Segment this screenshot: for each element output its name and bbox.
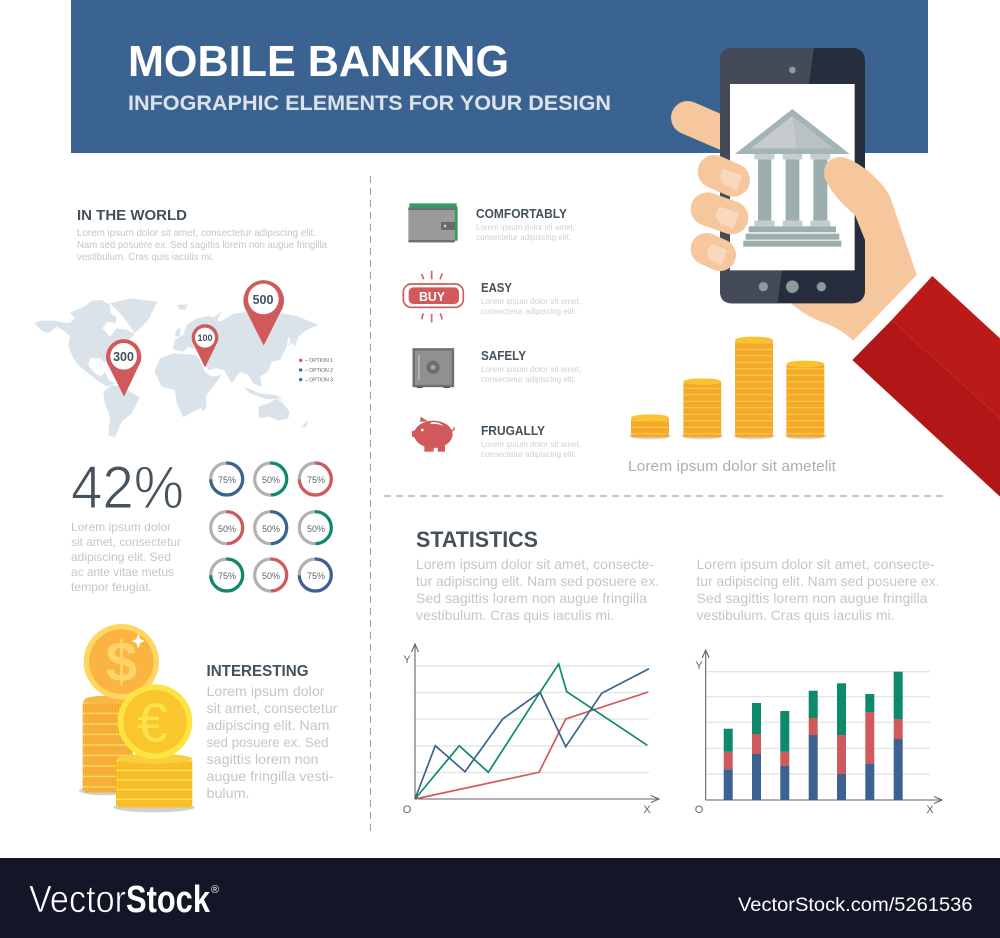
text block: in the world: Lorem ipsum dolor sit amet, consectetur adipiscing elit. xyxy=(77,227,316,239)
header banner xyxy=(71,0,928,153)
text column 1: Sed sagittis lorem non augue fringilla xyxy=(416,590,647,606)
pin: 500 xyxy=(243,280,284,346)
pin: 300 xyxy=(106,339,141,397)
stacked bar chart xyxy=(695,650,942,816)
dashed dividers xyxy=(370,176,943,835)
map: continents xyxy=(34,298,318,437)
feature icons xyxy=(403,203,463,452)
text block: 42%: tempor feugiat. xyxy=(71,580,152,594)
pin values: 100 xyxy=(197,333,213,343)
feature: easy xyxy=(481,280,581,316)
icon: buy button: BUY xyxy=(419,290,446,304)
donut labels: 50% xyxy=(218,524,236,534)
footer url: VectorStock.com/5261536 xyxy=(738,894,972,916)
donut labels: 75% xyxy=(218,571,236,581)
icon: bank building xyxy=(735,109,850,247)
text block: 42%: Lorem ipsum dolor xyxy=(71,520,171,534)
index finger xyxy=(688,118,730,136)
line chart: Y xyxy=(403,654,411,666)
feature: safely: Lorem ipsum dolor sit amet, xyxy=(481,364,581,374)
icon: piggy bank xyxy=(412,417,454,452)
map legend: – OPTION 1 xyxy=(305,358,333,364)
section: interesting xyxy=(206,663,338,801)
stacked bar chart: Y xyxy=(695,660,703,672)
subtitle: INFOGRAPHIC ELEMENTS FOR YOUR DESIGN xyxy=(128,92,611,115)
text column 1: Lorem ipsum dolor sit amet, consecte- xyxy=(416,556,654,572)
text block: 42%: adipiscing elit. Sed xyxy=(71,550,171,564)
icon: coin stacks with dollar and euro xyxy=(79,624,195,812)
text block: 42% xyxy=(71,520,181,594)
donut labels: 75% xyxy=(307,475,325,485)
line chart: X xyxy=(643,804,651,816)
donut labels: 50% xyxy=(262,475,280,485)
icon: buy button xyxy=(403,271,463,322)
feature: easy: consectetur adipiscing elit. xyxy=(481,306,576,316)
stacked bar chart: O xyxy=(695,804,704,816)
text block: interesting: sit amet, consectetur xyxy=(206,700,338,716)
phone xyxy=(720,48,865,303)
feature: comfortably xyxy=(476,206,575,242)
feature: comfortably: Lorem ipsum dolor sit amet, xyxy=(476,222,575,232)
text column 2: tur adipiscing elit. Nam sed posuere ex. xyxy=(696,573,940,589)
stacked bar chart: X xyxy=(926,804,934,816)
text block: interesting: adipiscing elit. Nam xyxy=(206,717,330,733)
fingernails xyxy=(707,169,742,265)
text block: in the world: vestibulum. Cras quis iaculis mi. xyxy=(77,251,214,263)
text block: interesting: sagittis lorem non xyxy=(206,751,318,767)
footer logo: Vector xyxy=(29,879,126,921)
legend dots xyxy=(299,359,302,381)
donut labels: 50% xyxy=(307,524,325,534)
text column 2: Sed sagittis lorem non augue fringilla xyxy=(696,590,928,606)
heading: in the world: IN THE WORLD xyxy=(77,208,187,224)
line chart xyxy=(403,644,659,816)
feature: safely: SAFELY xyxy=(481,348,526,363)
donut labels: 75% xyxy=(307,571,325,581)
line chart: O xyxy=(403,804,412,816)
map legend: – OPTION 3 xyxy=(305,378,333,384)
text block: 42%: ac ante vitae metus xyxy=(71,565,174,579)
donut labels: 50% xyxy=(262,571,280,581)
text column 2: vestibulum. Cras quis iaculis mi. xyxy=(696,607,894,623)
feature: frugally: Lorem ipsum dolor sit amet, xyxy=(481,439,581,449)
pin values xyxy=(113,293,273,364)
donut labels: 50% xyxy=(262,524,280,534)
text column 1: vestibulum. Cras quis iaculis mi. xyxy=(416,607,614,623)
feature: frugally: consectetur adipiscing elit. xyxy=(481,449,576,459)
feature: comfortably: consectetur adipiscing elit. xyxy=(476,232,571,242)
text column 2 xyxy=(696,556,940,623)
map legend: – OPTION 2 xyxy=(305,368,333,374)
section: in the world xyxy=(77,208,327,263)
pin values: 500 xyxy=(253,293,273,307)
text column 2: Lorem ipsum dolor sit amet, consecte- xyxy=(696,556,935,572)
feature: frugally xyxy=(481,423,581,459)
map legend xyxy=(305,358,333,384)
sleeve xyxy=(852,276,1000,497)
text block: 42%: sit amet, consectetur xyxy=(71,535,181,549)
fingers xyxy=(707,172,733,255)
donut labels: 75% xyxy=(218,475,236,485)
pin values: 300 xyxy=(113,350,134,364)
icon: wallet xyxy=(408,203,458,242)
section: statistics xyxy=(416,527,940,623)
world map with pins xyxy=(34,280,318,437)
coin stacks bar graphic xyxy=(629,337,827,439)
icon: coin stacks with dollar and euro: € xyxy=(137,692,168,754)
footer logo: Stock xyxy=(126,879,211,921)
palm xyxy=(792,162,917,341)
feature: safely: consectetur adipiscing elit. xyxy=(481,374,576,384)
text block: interesting xyxy=(206,683,338,801)
heading: interesting: INTERESTING xyxy=(206,663,308,680)
text block: interesting: augue fringilla vesti- xyxy=(206,768,334,784)
icon: coin stacks with dollar and euro: $ xyxy=(106,632,137,695)
feature: frugally: FRUGALLY xyxy=(481,423,545,438)
feature: comfortably: COMFORTABLY xyxy=(476,206,567,221)
text block: in the world: Nam sed posuere ex. Sed sagittis lorem non augue fringilla xyxy=(77,239,327,251)
coin caption: Lorem ipsum dolor sit ametelit xyxy=(628,458,837,475)
hand holding phone xyxy=(688,48,1000,497)
heading: statistics: STATISTICS xyxy=(416,527,538,552)
text column 1: tur adipiscing elit. Nam sed posuere ex. xyxy=(416,573,659,589)
text column 1 xyxy=(416,556,659,623)
text block: interesting: sed posuere ex. Sed xyxy=(206,734,328,750)
text block: interesting: Lorem ipsum dolor xyxy=(206,683,325,699)
footer logo xyxy=(29,879,219,921)
pin: 100 xyxy=(192,324,218,368)
thumb xyxy=(824,157,917,283)
feature: safely xyxy=(481,348,581,384)
text block: in the world xyxy=(77,227,327,263)
footer logo: ® xyxy=(211,884,219,896)
icon: safe xyxy=(414,349,453,388)
big stat: 42%: 42% xyxy=(71,454,184,521)
donut labels xyxy=(218,475,325,581)
feature: easy: Lorem ipsum dolor sit amet, xyxy=(481,296,581,306)
footer bar xyxy=(0,858,1000,938)
donut charts xyxy=(211,463,331,591)
text block: interesting: bulum. xyxy=(206,785,250,801)
title: MOBILE BANKING xyxy=(128,37,509,86)
feature: easy: EASY xyxy=(481,280,512,295)
